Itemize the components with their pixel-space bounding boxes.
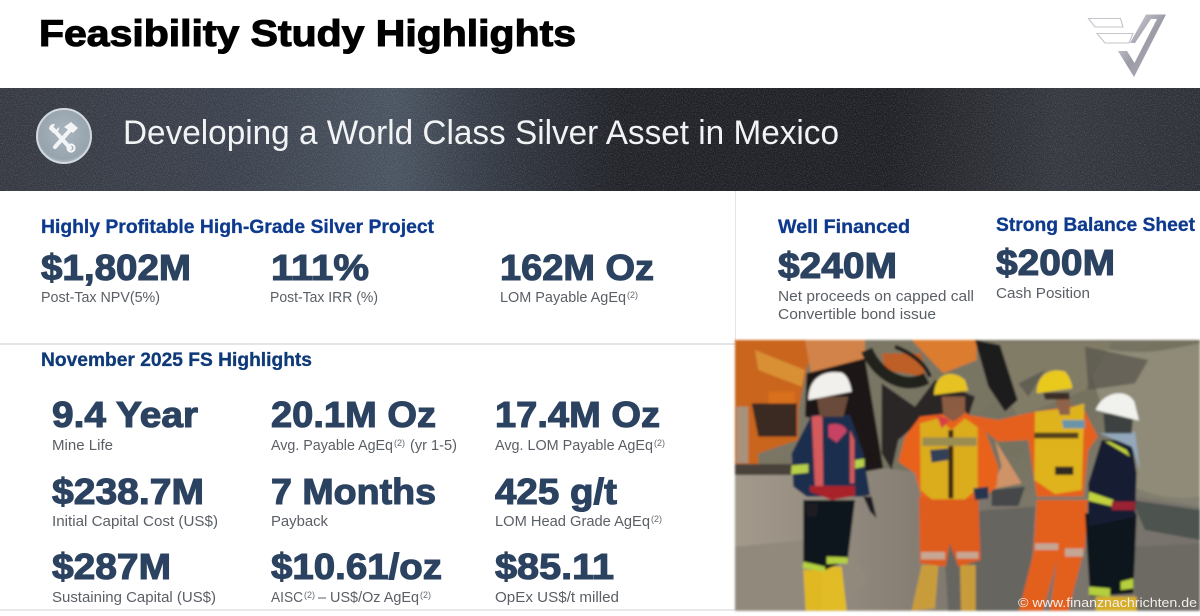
stat: initial capital: [52, 471, 218, 530]
stat: IRR: Post-Tax IRR (%): [270, 289, 378, 306]
description: proceeds: Net proceeds on capped call: [778, 288, 974, 305]
stat: payable AgEq: [500, 247, 654, 306]
banner: [0, 88, 1200, 191]
stat: NPV: [41, 247, 191, 306]
stat: NPV: Post-Tax NPV(5%): [41, 289, 160, 306]
heading: FS highlights: November 2025 FS Highlights: [41, 349, 312, 371]
stat: head grade: (2): [651, 514, 662, 524]
stat: LOM payable: Avg. LOM Payable AgEq: [495, 437, 653, 454]
description: cash: Cash Position: [996, 285, 1090, 302]
stat: AISC: AISC: [271, 589, 303, 606]
panel: balance sheet: [996, 214, 1195, 302]
icon: company logo: [1088, 14, 1166, 77]
stat: sustaining capital: [52, 546, 216, 606]
stat: AISC: (2): [420, 590, 431, 600]
stat: cash: $200M: [996, 242, 1115, 283]
title: Feasibility Study Highlights: [39, 13, 576, 54]
panel: FS highlights: [41, 349, 665, 606]
stat: initial capital: Initial Capital Cost (US$): [52, 513, 218, 530]
stat: AISC: $10.61/oz: [271, 546, 442, 587]
banner heading: Developing a World Class Silver Asset in Mexico: [123, 114, 839, 152]
stat: NPV: $1,802M: [41, 247, 191, 288]
stat: mine life: 9.4 Year: [52, 394, 198, 435]
stat: mine life: [52, 394, 198, 454]
stat: payable AgEq: (2): [627, 290, 638, 300]
stat: sustaining capital: $287M: [52, 546, 171, 587]
worker: navy jacket and white helmet: [1085, 393, 1140, 611]
heading: well financed: Well Financed: [778, 216, 910, 238]
stat: initial capital: $238.7M: [52, 471, 204, 512]
stat: mine life: Mine Life: [52, 437, 113, 454]
stat: OpEx: OpEx US$/t milled: [495, 589, 619, 606]
heading: balance sheet: Strong Balance Sheet: [996, 214, 1195, 236]
stat: average payable: (yr 1-5): [410, 437, 457, 454]
worker: orange coveralls with raised arm: [968, 370, 1098, 611]
panel: highly profitable project: [41, 216, 654, 306]
worker: orange coveralls with yellow vest: [898, 374, 998, 611]
photo: four mine workers in front of drilling equipment: [735, 340, 1200, 611]
stat: payback: Payback: [271, 513, 328, 530]
stat: sustaining capital: Sustaining Capital (US$): [52, 589, 216, 606]
stat: head grade: LOM Head Grade AgEq: [495, 513, 650, 530]
stat: payback: 7 Months: [271, 471, 436, 512]
icon: hammer and wrench badge: [37, 109, 91, 163]
stat: OpEx: $85.11: [495, 546, 614, 587]
stat: IRR: [270, 247, 378, 306]
watermark: © www.finanznachrichten.de: [1018, 595, 1197, 610]
stat: head grade: 425 g/t: [495, 471, 617, 512]
stat: IRR: 111%: [271, 247, 369, 288]
description: proceeds: [778, 288, 974, 323]
stat: payable AgEq: 162M Oz: [500, 247, 654, 288]
stat: average payable: 20.1M Oz: [271, 394, 436, 435]
stat: LOM payable: (2): [654, 438, 665, 448]
stat: LOM payable: [495, 394, 665, 454]
stat: average payable: (2): [394, 438, 405, 448]
stat: AISC: [271, 546, 442, 606]
stat: average payable: [271, 394, 457, 454]
panel: well financed: [778, 216, 974, 323]
heading: project: Highly Profitable High-Grade Silver Project: [41, 216, 434, 238]
stat: OpEx: [495, 546, 619, 606]
stat: AISC: – US$/Oz AgEq: [318, 589, 419, 606]
stat: payback: [271, 471, 436, 530]
stat: proceeds: $240M: [778, 245, 897, 286]
worker: navy coveralls: [791, 372, 877, 611]
stat: payable AgEq: LOM Payable AgEq: [500, 289, 626, 306]
stat: average payable: Avg. Payable AgEq: [271, 437, 393, 454]
stat: LOM payable: 17.4M Oz: [495, 394, 660, 435]
description: proceeds: Convertible bond issue: [778, 306, 936, 323]
stat: AISC: (2): [304, 590, 315, 600]
machinery: [735, 340, 1025, 506]
stat: head grade: [495, 471, 662, 530]
